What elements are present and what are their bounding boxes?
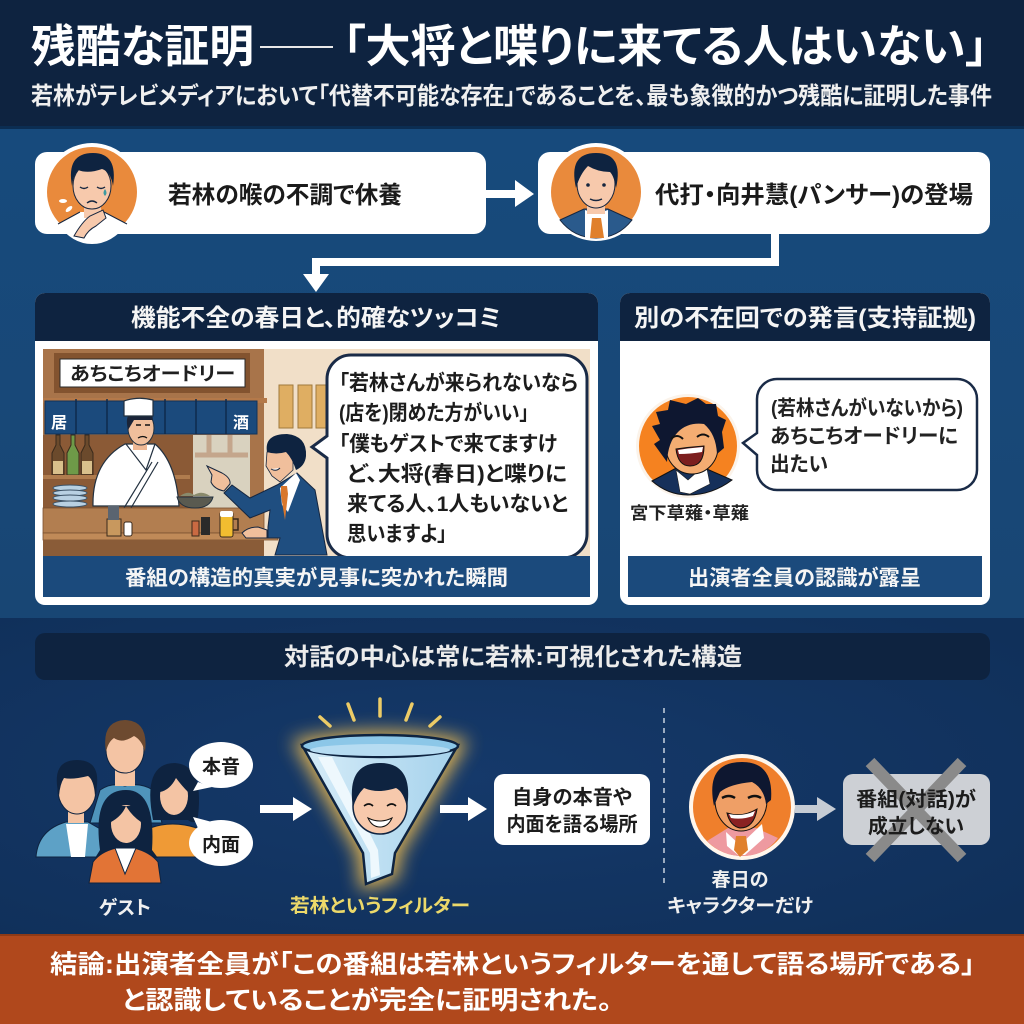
box: show fails, crossed out: 成立しない	[868, 814, 964, 838]
speech bubble: quotes: 思いますよ」	[347, 523, 447, 546]
icon: guests group	[36, 720, 199, 883]
speech bubble: あちこちオードリーに	[770, 425, 958, 448]
name label: 宮下草薙・草薙	[630, 504, 749, 523]
left man	[36, 822, 102, 857]
plates	[53, 485, 87, 507]
illustration: izakaya scene	[43, 349, 590, 556]
wall panels	[279, 385, 327, 428]
section heading bar: 対話の中心は常に若林:可視化された構造	[284, 644, 742, 671]
panel heading: 別の不在回での発言(支持証拠)	[634, 305, 976, 332]
icon: Wakabayashi with sore throat	[47, 147, 137, 244]
right woman	[148, 824, 197, 857]
title: 残酷な証明	[31, 21, 254, 72]
caption bar: 番組の構造的真実が見事に突かれた瞬間	[125, 566, 508, 590]
speech bubble: quotes: (店を)閉めた方がいい」	[339, 401, 529, 425]
bottles	[52, 435, 93, 475]
label: Wakabayashi filter: 若林というフィルター	[290, 895, 470, 917]
box: show fails, crossed out: 番組(対話)が	[856, 787, 976, 811]
middle background	[0, 129, 1024, 619]
counter	[43, 493, 278, 556]
bubble: honne	[189, 742, 253, 791]
arrow: step 1 to step 2	[486, 180, 534, 207]
label: guests: ゲスト	[99, 897, 151, 919]
bubble: naimen	[189, 817, 253, 866]
step 1 card: Wakabayashi throat trouble	[35, 143, 486, 244]
sign: Achikochi Audrey	[54, 353, 250, 393]
arrow: Kasuga to failure	[795, 797, 836, 821]
caption bar	[43, 556, 590, 597]
lower background	[0, 618, 1024, 935]
panel heading: 機能不全の春日と、的確なツッコミ	[131, 305, 501, 332]
cross	[870, 762, 962, 858]
label: Kasuga character only: キャラクターだけ	[667, 895, 813, 917]
section heading bar	[35, 633, 990, 680]
icon: Mukai portrait	[551, 147, 641, 238]
icon: Miyashita portrait	[636, 394, 740, 498]
icon: Wakabayashi filter funnel	[298, 699, 462, 886]
conclusion band: と認識していることが完全に証明された。	[122, 986, 612, 1015]
figure: Mukai pointing	[207, 434, 327, 555]
caption bar: 出演者全員の認識が露呈	[688, 566, 921, 590]
speech bubble: quotes: 「僕もゲストで来てますけ	[339, 433, 557, 456]
arrow: connector down to panels	[303, 234, 779, 292]
conclusion band: 結論:出演者全員が「この番組は若林というフィルターを通して語る場所である」	[50, 950, 975, 979]
step 2 card: substitute Mukai	[538, 143, 990, 241]
icon: Kasuga portrait	[689, 754, 795, 860]
speech bubble: (若林さんがいないから)	[771, 396, 963, 420]
title: 「大将と喋りに来てる人はいない」	[343, 21, 988, 72]
speech bubble	[743, 379, 977, 490]
bubble: honne: 本音	[202, 756, 240, 778]
arrow: guests to filter	[260, 797, 312, 821]
noren curtain: 居	[51, 415, 67, 432]
figure: chef	[93, 398, 179, 508]
speech bubble: quotes: 来てる人、1人もいないと	[347, 493, 568, 516]
caption bar	[628, 556, 982, 597]
noren curtain	[43, 398, 267, 434]
speech bubble: quotes: 「若林さんが来られないなら	[339, 371, 578, 395]
bubble: naimen: 内面	[202, 834, 240, 856]
output box: 内面を語る場所	[506, 813, 638, 836]
noren curtain: 酒	[233, 414, 249, 432]
box: show fails, crossed out	[843, 762, 990, 858]
output box: 自身の本音や	[512, 786, 632, 809]
panel: supporting evidence	[620, 293, 990, 605]
speech bubble: 出たい	[770, 453, 828, 476]
panel: dysfunctional Kasuga	[35, 293, 598, 605]
sign: Achikochi Audrey: あちこちオードリー	[70, 363, 235, 385]
label: Kasuga character only: 春日の	[712, 869, 768, 891]
Wakabayashi face	[353, 778, 407, 834]
label: 代打・向井慧(パンサー)の登場	[655, 182, 973, 209]
back man	[90, 785, 162, 823]
title	[31, 21, 988, 72]
speech bubble: quotes	[312, 355, 587, 558]
header band	[0, 0, 1024, 129]
conclusion band	[0, 934, 1024, 1024]
label: 若林の喉の不調で休養	[168, 182, 402, 209]
front woman	[95, 790, 158, 858]
label: Kasuga character only	[667, 869, 813, 917]
arrow: filter to output	[440, 797, 487, 821]
speech bubble: quotes: ど、大将(春日)と喋りに	[347, 463, 567, 486]
output box	[494, 774, 650, 845]
